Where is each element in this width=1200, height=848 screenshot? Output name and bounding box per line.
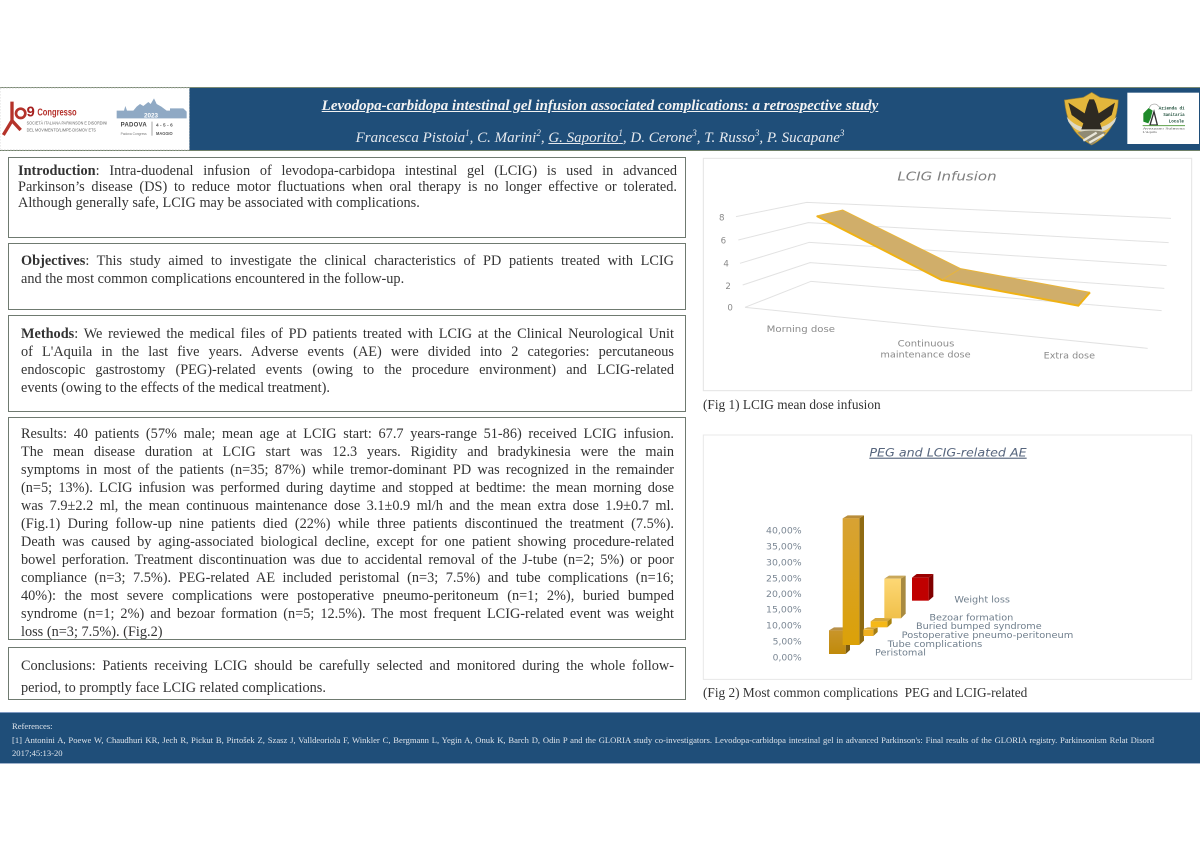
chart: LCIG infusion: 6: [721, 237, 726, 247]
chart: PEG and LCIG-related adverse events: 30,00%: [766, 559, 802, 569]
logo: 9th congress Padova: DEL MOVIMENTO/LIMPE-DISMOV ETS: [27, 128, 96, 133]
conclusions text: Conclusions: Patients receiving LCIG should be carefully selected and monitored during the whole follow-: [21, 658, 674, 674]
chart: LCIG infusion: Extra dose: [1044, 351, 1095, 361]
chart: PEG and LCIG-related adverse events: Weight loss: [954, 595, 1011, 605]
panel: objectives: [8, 243, 686, 310]
chart: PEG and LCIG-related adverse events: 10,00%: [766, 621, 802, 631]
methods text: Methods: We reviewed the medical files of PD patients treated with LCIG at the Clinical Neurological Unit: [21, 326, 674, 342]
chart: PEG and LCIG-related adverse events: 15,00%: [766, 606, 802, 616]
logo: 9th congress Padova: MAGGIO: [156, 131, 173, 136]
logo: 9th congress Padova: 9: [27, 105, 35, 121]
caption: figure 2: (Fig 2) Most common complications PEG and LCIG-related: [703, 685, 1027, 700]
logo: 9th congress Padova: Congresso: [37, 107, 77, 118]
chart: PEG and LCIG-related adverse events: Tube complications: [887, 640, 983, 650]
logo: 9th congress Padova: PADOVA: [121, 123, 147, 129]
methods text: of L'Aquila in the last five years. Adverse events (AE) were divided into 2 categories: percutaneous: [21, 344, 674, 360]
introduction text: Introduction: Intra-duodenal infusion of levodopa-carbidopa intestinal gel (LCIG) is used in advanced: [18, 163, 677, 179]
chart: LCIG infusion: Morning dose: [767, 325, 835, 335]
conclusions text: [21, 658, 674, 696]
chart: LCIG infusion: 2: [725, 282, 731, 292]
methods text: [21, 326, 674, 396]
panel: results: [8, 417, 686, 640]
logo: 9th congress Padova: SOCIETÀ ITALIANA PARKINSON E DISORDINI: [27, 119, 107, 125]
chart: PEG and LCIG-related adverse events: 25,00%: [766, 574, 802, 584]
results text: syndrome (n=1; 2%) and bezoar formation (n=5; 12.5%). The most frequent LCIG-related event was weight: [21, 606, 674, 622]
chart: LCIG infusion: Continuous: [898, 339, 955, 349]
results text: loss (n=3; 7.5%). (Fig.2): [21, 624, 162, 640]
references text: References:: [12, 721, 53, 731]
results text: Death was caused by aging-associated biological decline, except for one patient showing procedure-related: [21, 534, 674, 550]
introduction text: Although generally safe, LCIG may be associated with complications.: [18, 195, 420, 211]
results text: [21, 426, 674, 640]
results text: symptoms in most of the patients (n=35; 87%) while tremor-dominant PD was recognized in the remainder: [21, 462, 674, 478]
chart: PEG and LCIG-related adverse events: [703, 434, 1192, 680]
panel: introduction: [8, 157, 686, 238]
logos: crest and local health authority: Avezzano Sulmona: [1143, 127, 1186, 131]
chart: LCIG infusion: LCIG Infusion: [897, 170, 997, 184]
methods text: endoscopic gastrostomy (PEG)-related events (owing to the procedure environment) and LCIG-related: [21, 362, 674, 378]
caption: figure 1: (Fig 1) LCIG mean dose infusion: [703, 397, 881, 412]
chart: PEG and LCIG-related adverse events: Postoperative pneumo-peritoneum: [902, 631, 1073, 641]
chart: PEG and LCIG-related adverse events: 20,00%: [766, 590, 802, 600]
logos: crest and local health authority: Azienda di: [1159, 105, 1185, 111]
results text: (n=5; 13%). LCIG infusion was performed during daytime and stopped at bedtime: the mean morning dose: [21, 480, 674, 496]
chart: PEG and LCIG-related adverse events: Peristomal: [875, 649, 926, 659]
panel: conclusions: [8, 647, 686, 700]
logos: crest and local health authority: L'Aquila: [1143, 130, 1158, 134]
chart: PEG and LCIG-related adverse events: 40,00%: [766, 526, 802, 536]
chart: LCIG infusion: 4: [723, 259, 729, 269]
results text: compliance (n=3; 7.5%). PEG-related AE included peristomal (n=3; 7.5%) and tube complications (n=16;: [21, 570, 674, 586]
references text: 2017;45:13-20: [12, 748, 63, 758]
introduction text: Parkinson’s disease (DS) to reduce motor fluctuations when oral therapy is no longer effective or tolerated.: [18, 179, 677, 195]
methods text: events (owing to the effects of the medical treatment).: [21, 380, 330, 396]
objectives text: [21, 253, 674, 287]
logos: crest and local health authority: Sanitaria: [1163, 112, 1185, 118]
chart: PEG and LCIG-related adverse events: 5,00%: [773, 637, 802, 647]
chart: PEG and LCIG-related adverse events: 0,00%: [773, 653, 802, 663]
results text: (Fig.1) During follow-up nine patients died (22%) while three patients discontinued the treatment (7.5%).: [21, 516, 674, 532]
logo: 9th congress Padova: Padova Congress: [121, 131, 147, 136]
poster title: Levodopa-carbidopa intestinal gel infusion associated complications: a retrospective study: [322, 98, 878, 114]
chart: PEG and LCIG-related adverse events: 35,00%: [766, 542, 802, 552]
chart: LCIG infusion: maintenance dose: [880, 351, 971, 361]
header banner: [0, 87, 1200, 151]
panel: methods: [8, 315, 686, 412]
logo: 9th congress Padova: [0, 88, 190, 150]
logo: 9th congress Padova: 4-5-6: [156, 123, 173, 128]
conclusions text: period, to promptly face LCIG related complications.: [21, 680, 326, 696]
logos: crest and local health authority: Locale: [1169, 119, 1184, 125]
objectives text: and the most common complications encountered in the follow-up.: [21, 271, 404, 287]
chart: LCIG infusion: [702, 158, 1192, 392]
results text: Results: 40 patients (57% male; mean age at LCIG start: 67.7 years-range 51-86) received LCIG infusion.: [21, 426, 674, 442]
chart: PEG and LCIG-related adverse events: Buried bumped syndrome: [916, 622, 1042, 632]
introduction text: [18, 163, 677, 211]
references text: [12, 721, 1154, 758]
chart: LCIG infusion: 0: [727, 304, 733, 314]
objectives text: Objectives: This study aimed to investigate the clinical characteristics of PD patients treated with LCIG: [21, 253, 674, 269]
references text: [1] Antonini A, Poewe W, Chaudhuri KR, Jech R, Pickut B, Pirtošek Z, Szasz J, Valldeoriola F, Winkler C, Bergmann L, Yegin A, Onuk K, Barch D, Odin P and the GLORIA study co-investigators. Levodopa-carbidopa intestinal gel in advanced Parkinson's: Final results of the GLORIA registry. Parkinsonism Relat Disord: [12, 734, 1154, 744]
logo: 9th congress Padova: 2023: [144, 112, 159, 119]
results text: was 7.9±2.2 ml, the mean continuous maintenance dose 3.1±0.9 ml/h and the mean extra dose 1.9±0.7 ml.: [21, 498, 674, 514]
results text: 40%): the most severe complications were postoperative pneumo-peritoneum (n=1; 2%), buried bumped: [21, 588, 674, 604]
results text: The mean disease duration at LCIG start was 12.3 years. Rigidity and bradykinesia were the main: [21, 444, 674, 460]
authors: Francesca Pistoia1, C. Marini2, G. Saporito1, D. Cerone3, T. Russo3, P. Sucapane3: [356, 128, 844, 146]
chart: PEG and LCIG-related adverse events: Bezoar formation: [929, 613, 1013, 623]
chart title: PEG and LCIG-related AE: [869, 446, 1028, 460]
references footer: [0, 712, 1200, 764]
chart: LCIG infusion: 8: [719, 214, 725, 224]
results text: bowel perforation. Treatment discontinuation was due to accidental removal of the J-tube (n=2; 5%) or poor: [21, 552, 674, 568]
logos: crest and local health authority: [1064, 92, 1199, 146]
